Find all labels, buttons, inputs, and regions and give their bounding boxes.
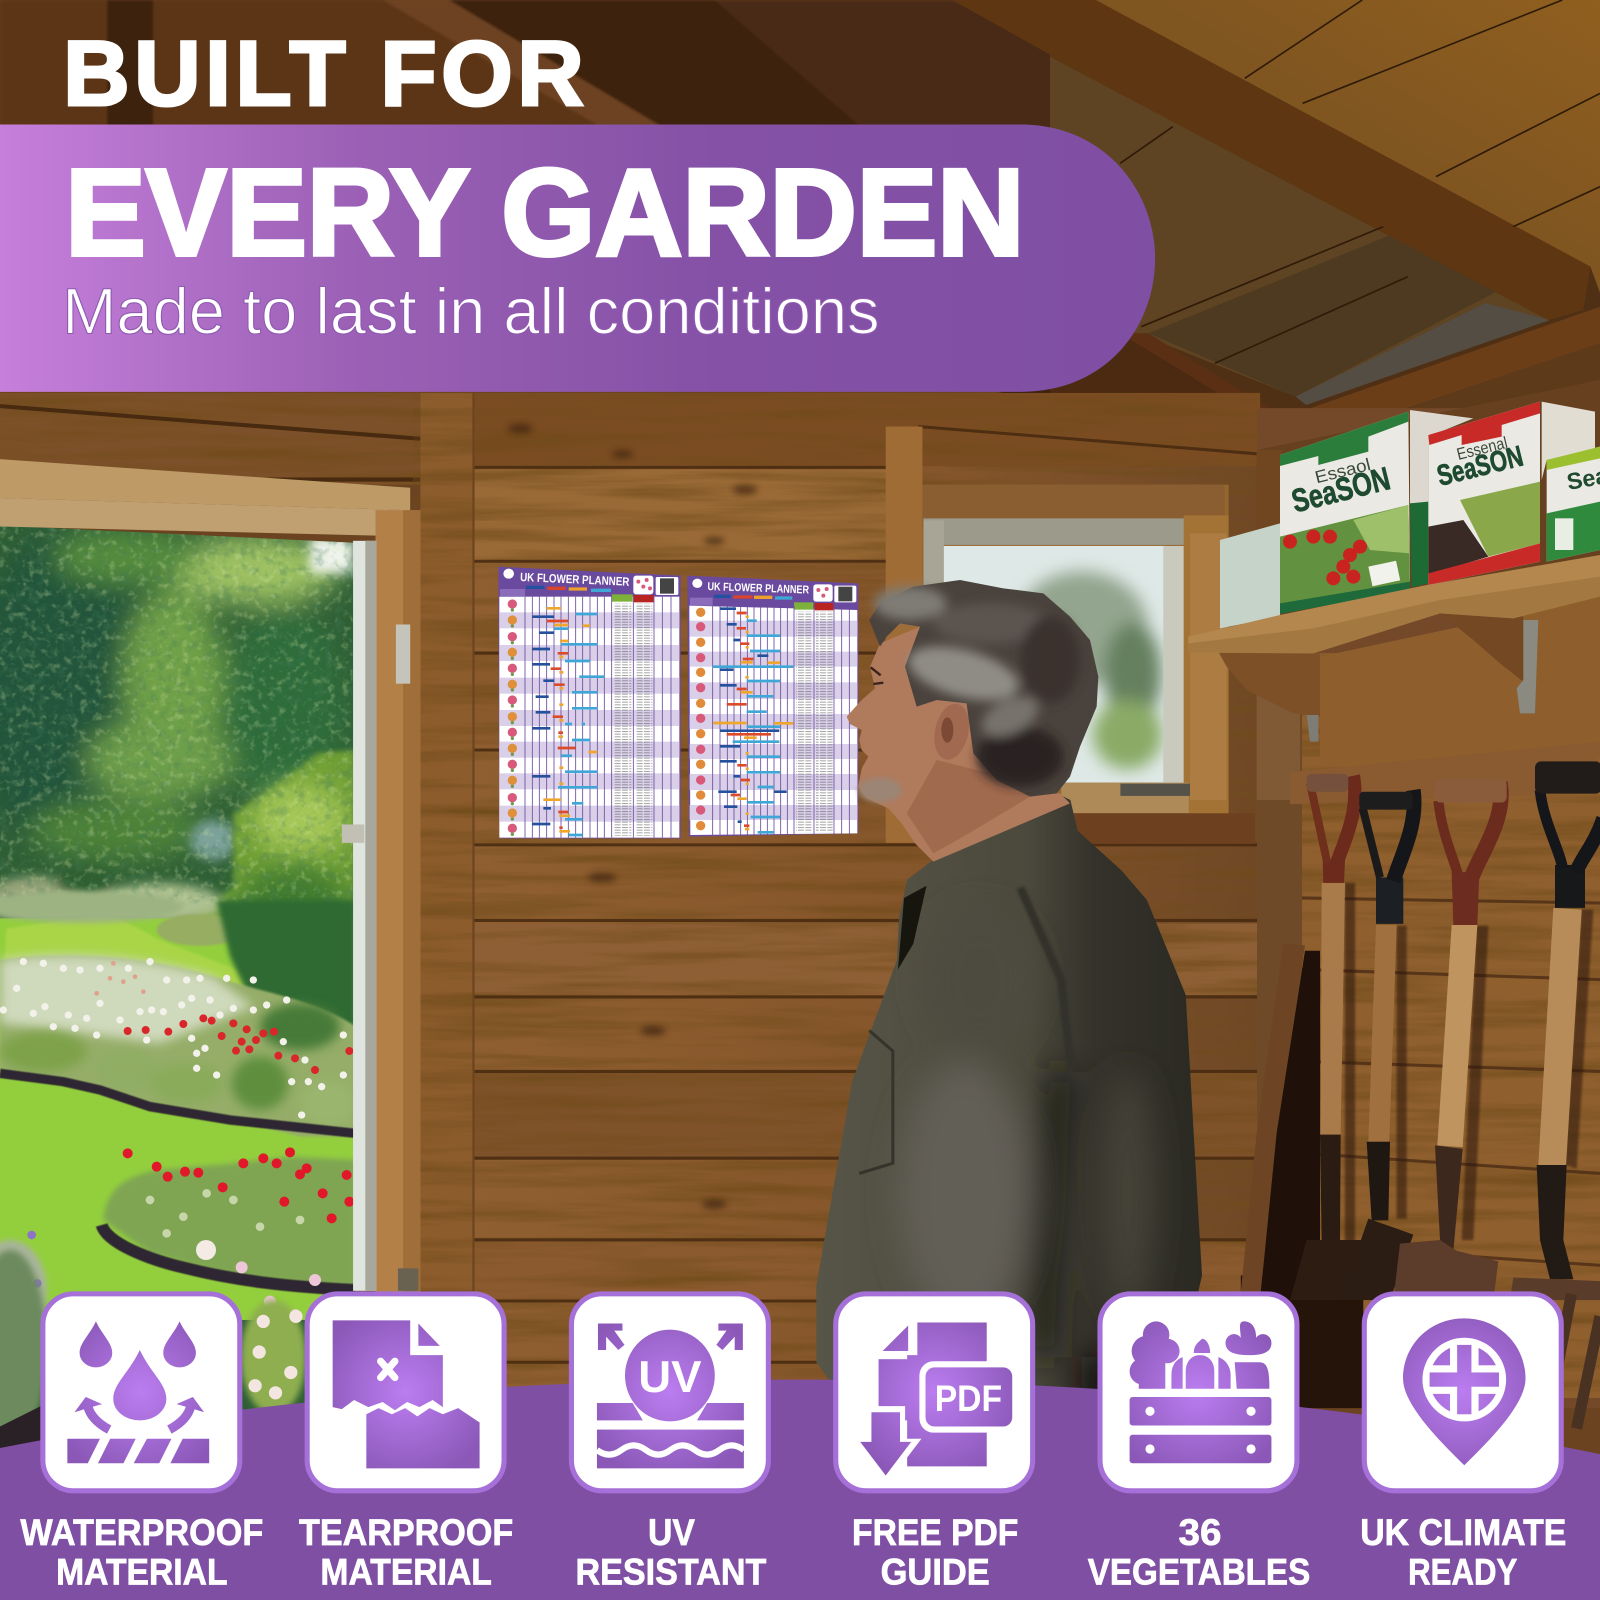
white flowers (3, 962, 343, 1115)
label: waterproof (20, 1512, 263, 1593)
label: 36 vegetables (1088, 1512, 1310, 1593)
heading: every garden: EVERY GARDEN (65, 144, 1024, 282)
feature: 36 vegetables (1100, 1294, 1297, 1491)
window (886, 427, 1255, 844)
feature: tearproof (307, 1294, 504, 1491)
lower bed (103, 1157, 356, 1290)
icon: pdf document download (848, 1322, 1015, 1486)
bottom feature band (0, 1380, 1600, 1600)
feature: uk climate ready (1364, 1294, 1561, 1491)
icon: water drops on surface (67, 1321, 209, 1463)
icon: uk location pin (1403, 1318, 1526, 1465)
ceiling right (1050, 0, 1600, 450)
spade 3 (1393, 779, 1507, 1300)
ceiling left (0, 0, 1276, 408)
back shrub (202, 748, 353, 916)
label: uk climate ready: READY (1408, 1552, 1517, 1593)
rail (1290, 742, 1600, 804)
label: uv resistant: RESISTANT (576, 1552, 767, 1593)
icon: uv sun over layers (597, 1323, 744, 1468)
label: waterproof: WATERPROOF (20, 1512, 263, 1553)
box: Season green: Essaol (1313, 454, 1373, 487)
man looking at poster (816, 580, 1202, 1408)
label: uk climate ready: UK CLIMATE (1360, 1512, 1566, 1553)
feature: waterproof (43, 1294, 240, 1491)
right wall (1257, 408, 1600, 1408)
feature: free pdf guide (836, 1294, 1033, 1491)
wall below shelf (1320, 597, 1600, 767)
wall planks (474, 393, 1270, 1393)
box: Season red: SeaSON (1434, 440, 1526, 493)
window glass (943, 546, 1165, 783)
shelf board (1188, 555, 1600, 653)
hinges (396, 624, 410, 684)
icon: vegetable crate (1130, 1321, 1271, 1463)
poster heading: UK FLOWER PLANNER (707, 581, 809, 597)
label: uk climate ready (1360, 1512, 1566, 1593)
shirt (816, 795, 1202, 1398)
label: free pdf guide (852, 1512, 1018, 1593)
background wall behind shelf (1257, 380, 1600, 647)
trees (0, 527, 355, 940)
box: Season green: SeaSON (1288, 459, 1394, 519)
left flower clump (0, 1236, 50, 1314)
tools on rail (1240, 742, 1600, 1300)
hair (869, 580, 1098, 797)
small pale box (1220, 523, 1280, 628)
box: third (1547, 447, 1600, 562)
label: 36 vegetables: 36 (1179, 1512, 1221, 1553)
back hedge (0, 870, 223, 923)
spade 2 (1340, 790, 1414, 1300)
fork tines (1543, 1294, 1600, 1444)
label: tearproof (299, 1512, 513, 1593)
label: free pdf guide: FREE PDF (852, 1512, 1018, 1553)
label: uv resistant (576, 1512, 767, 1593)
sky gap (310, 537, 353, 573)
label: tearproof: TEARPROOF (299, 1512, 513, 1553)
label: tearproof: MATERIAL (320, 1552, 492, 1593)
label: uv resistant: UV (648, 1512, 695, 1553)
window post and corner post (1190, 533, 1227, 800)
shirt inner collar (898, 886, 927, 969)
neck and face (847, 580, 1098, 862)
leaning handle (1240, 944, 1305, 1300)
banner pill (0, 124, 1155, 392)
planner poster: left (498, 567, 681, 838)
label: waterproof: MATERIAL (56, 1552, 228, 1593)
red flowers upper bed (128, 1018, 349, 1070)
label: 36 vegetables: VEGETABLES (1088, 1552, 1310, 1593)
brackets (1218, 652, 1320, 717)
icon: uv sun over layers: UV (638, 1351, 702, 1402)
spade 1 (1290, 774, 1380, 1300)
foliage texture (0, 526, 352, 903)
shelf with seed boxes (1188, 380, 1600, 800)
label: free pdf guide: GUIDE (881, 1552, 990, 1593)
box: Season red (1428, 402, 1595, 585)
icon: torn document (333, 1320, 480, 1468)
top banner (0, 23, 1155, 392)
ear (929, 700, 974, 763)
planner poster: right (687, 576, 858, 837)
subtitle: Made to last in all conditions (62, 275, 880, 348)
poster heading: UK FLOWER PLANNER (520, 570, 630, 589)
lower left flowers beside tile (0, 1250, 47, 1444)
shirt pocket (859, 1031, 893, 1173)
box: Season green (1280, 410, 1473, 614)
pink flower clump (241, 1300, 306, 1414)
fork 4 (1510, 761, 1600, 1300)
door frame and header (0, 393, 472, 1296)
flower beds and lawns (0, 891, 357, 1340)
heading: built for: BUILT FOR (63, 23, 584, 125)
icon: pdf document download: PDF (935, 1378, 1002, 1419)
garden view through door (0, 520, 357, 1459)
box: Season red: Essenal (1455, 433, 1509, 464)
feature: uv resistant (571, 1294, 768, 1491)
tool shadows (1345, 883, 1593, 1300)
eye and brow (871, 667, 883, 684)
shirt seam (1020, 888, 1071, 1071)
